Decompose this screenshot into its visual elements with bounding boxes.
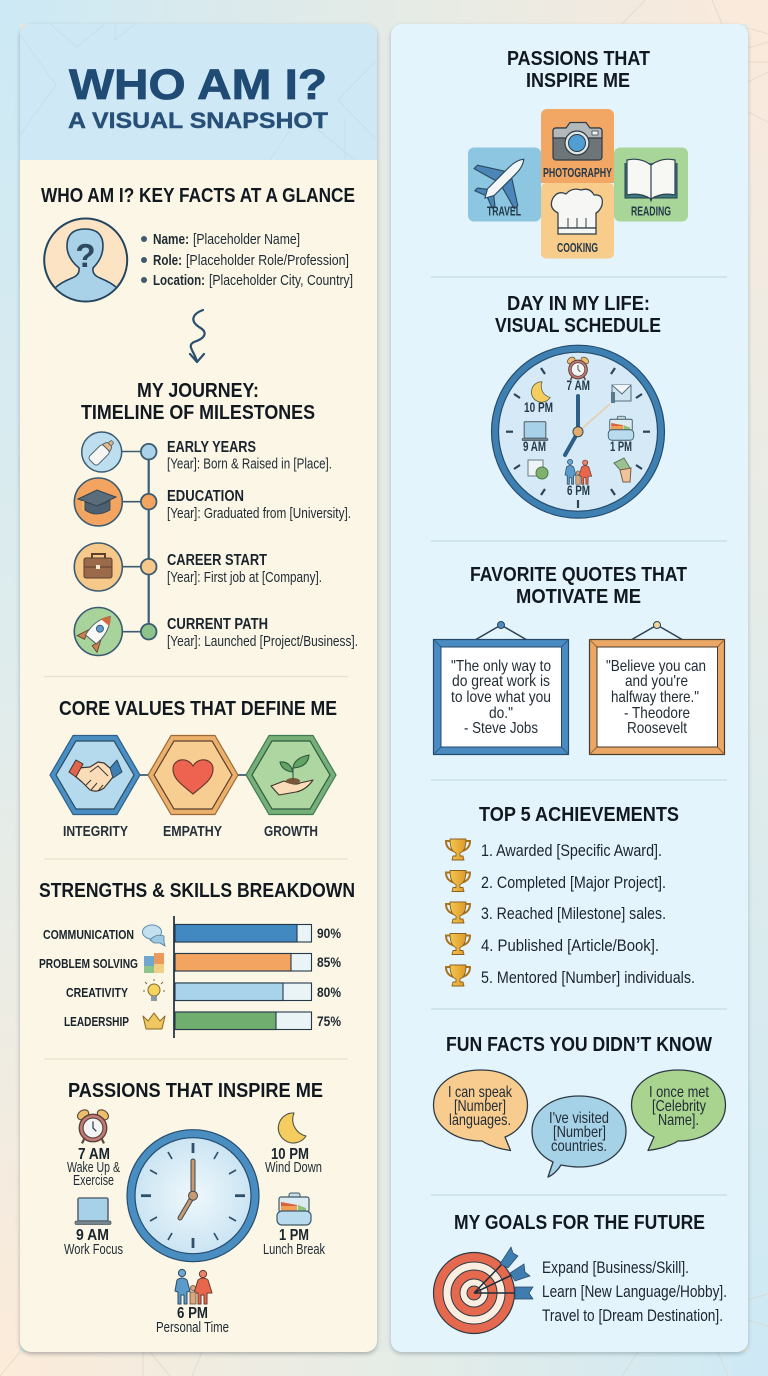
heading: passions: PASSIONS THAT INSPIRE ME [68, 1079, 323, 1102]
heading: quotes [470, 563, 687, 608]
event: 1 PM: Lunch Break [263, 1242, 326, 1258]
icon: mystery person avatar: ? [75, 237, 96, 274]
quote frame: Theodore Roosevelt: halfway there." [611, 689, 699, 706]
title banner [20, 24, 377, 160]
achievement 2 [446, 870, 666, 892]
achievement 5: 5. Mentored [Number] individuals. [481, 969, 695, 987]
title: who am I: WHO AM I? [69, 61, 327, 109]
quote frame: Steve Jobs [434, 622, 568, 754]
clock item: 7 AM: 7 AM [566, 378, 590, 393]
clock item: 9 AM: 9 AM [523, 439, 546, 454]
heading: achievements: TOP 5 ACHIEVEMENTS [479, 803, 679, 826]
event: 10 PM [265, 1113, 322, 1176]
section: achievements [446, 803, 695, 987]
event: 9 AM: Work Focus [64, 1242, 123, 1258]
event: 7 AM: 7 AM [78, 1146, 110, 1163]
clock item: 7 AM [566, 356, 590, 393]
quote frame: Steve Jobs: do great work is [452, 673, 550, 690]
value: integrity [50, 736, 140, 814]
value: empathy [148, 736, 238, 814]
event: 6 PM [156, 1269, 229, 1336]
facts list: Location: [153, 273, 205, 289]
milestone: early years: [Year]: Born & Raised in [Place]. [167, 456, 332, 472]
heading: journey: MY JOURNEY: [137, 379, 259, 402]
bar: creativity: CREATIVITY [66, 986, 129, 1000]
achievement 3: 3. Reached [Milestone] sales. [481, 905, 666, 923]
icon: mystery person avatar [44, 218, 127, 310]
panel: right column [391, 24, 748, 1352]
milestone: career start [74, 543, 322, 591]
event: 7 AM: Exercise [73, 1173, 114, 1189]
heading: fun facts: FUN FACTS YOU DIDN’T KNOW [446, 1033, 713, 1056]
section: day schedule [492, 292, 664, 518]
event: 9 AM: 9 AM [76, 1227, 109, 1244]
tile: travel [463, 139, 544, 222]
icon: hand with leaves [614, 458, 631, 482]
quote frame: Theodore Roosevelt: - Theodore [624, 705, 690, 722]
achievement 3 [446, 902, 666, 923]
tile: photography [541, 109, 614, 183]
value labels: INTEGRITY [63, 824, 128, 840]
milestone: early years [82, 432, 332, 472]
goals list: Travel to [Dream Destination]. [542, 1307, 723, 1325]
clock [127, 1130, 259, 1262]
speech bubble: languages: [Number] [454, 1098, 506, 1115]
milestone: career start: [Year]: First job at [Company]. [167, 570, 322, 586]
milestone: education: EDUCATION [167, 488, 244, 505]
event: 10 PM: Wind Down [265, 1160, 322, 1176]
section: passions tiles [463, 47, 688, 258]
quote frame: Steve Jobs: to love what you [451, 689, 551, 706]
milestone: current path [74, 608, 358, 656]
bar: leadership: 75% [317, 1013, 341, 1029]
section: goals [434, 1211, 727, 1334]
speech bubble: countries: [Number] [553, 1124, 606, 1141]
icon: target with arrows [434, 1247, 533, 1334]
speech bubble: celebrity [632, 1070, 726, 1150]
heading: key facts: WHO AM I? KEY FACTS AT A GLANCE [41, 184, 355, 207]
milestone: education [74, 478, 351, 526]
achievement 2: 2. Completed [Major Project]. [481, 874, 666, 892]
heading: passions tiles [507, 47, 650, 92]
value: growth [246, 736, 336, 814]
event: 6 PM: 6 PM [177, 1305, 208, 1322]
milestone: early years: EARLY YEARS [167, 439, 256, 456]
tile: cooking: COOKING [557, 241, 598, 255]
achievement 1 [446, 839, 662, 860]
tile: cooking [541, 183, 614, 258]
heading: passions tiles: PASSIONS THAT [507, 47, 650, 70]
clock: visual schedule [492, 345, 664, 518]
heading: quotes: FAVORITE QUOTES THAT [470, 563, 687, 586]
heading: goals: MY GOALS FOR THE FUTURE [454, 1211, 705, 1234]
bar: leadership: LEADERSHIP [64, 1015, 129, 1029]
section: passions clock [64, 1079, 326, 1336]
facts list: Role: [153, 253, 182, 269]
event: 6 PM: Personal Time [156, 1320, 229, 1336]
section: fun facts [434, 1033, 726, 1177]
goals list: Learn [New Language/Hobby]. [542, 1283, 727, 1301]
facts list: [Placeholder City, Country] [209, 273, 353, 289]
bar: creativity: 80% [317, 984, 341, 1000]
bar: communication [43, 924, 341, 946]
speech bubble: countries: countries. [551, 1138, 607, 1155]
event: 1 PM: 1 PM [279, 1227, 309, 1244]
clock item: 1 PM [608, 416, 634, 454]
goals list [542, 1259, 727, 1325]
bar: communication: 90% [317, 925, 341, 941]
quote frame: Theodore Roosevelt: "Believe you can [606, 658, 706, 675]
icon: calendar [528, 460, 548, 479]
subtitle: A VISUAL SNAPSHOT [68, 108, 328, 133]
quote frame: Theodore Roosevelt: Roosevelt [627, 720, 687, 737]
bar: problem solving: PROBLEM SOLVING [39, 957, 138, 971]
speech bubble: countries [532, 1096, 626, 1177]
clock item: 1 PM: 1 PM [610, 439, 632, 454]
speech bubble: languages: I can speak [448, 1084, 513, 1101]
icon: photo mail [611, 385, 631, 403]
value labels: GROWTH [264, 824, 318, 840]
heading: day in my life: VISUAL SCHEDULE [495, 314, 661, 337]
heading: quotes: MOTIVATE ME [516, 585, 641, 608]
speech bubble: celebrity: Name]. [658, 1112, 699, 1129]
quote frame: Steve Jobs: - Steve Jobs [464, 720, 538, 737]
achievement 4: 4. Published [Article/Book]. [481, 937, 659, 955]
clock item: 6 PM: 6 PM [567, 483, 590, 498]
speech bubble: languages [434, 1070, 528, 1150]
section: skills bar chart [39, 879, 355, 1038]
quote frame: Theodore Roosevelt [590, 622, 724, 754]
achievement 1: 1. Awarded [Specific Award]. [481, 842, 662, 860]
bar: problem solving [39, 953, 341, 973]
heading: day in my life [495, 292, 661, 337]
value labels: EMPATHY [163, 824, 222, 840]
panel: left column [20, 24, 377, 1352]
facts list: Name: [153, 232, 189, 248]
facts list: [Placeholder Name] [193, 232, 300, 248]
value labels [63, 824, 318, 840]
quote frame: Steve Jobs: do." [489, 705, 513, 722]
speech bubble: languages: languages. [449, 1112, 511, 1129]
bar: communication: COMMUNICATION [43, 928, 134, 942]
heading: journey: TIMELINE OF MILESTONES [81, 401, 315, 424]
tile: photography: PHOTOGRAPHY [543, 166, 612, 180]
section: key facts [41, 184, 355, 362]
bar: problem solving: 85% [317, 954, 341, 970]
speech bubble: celebrity: I once met [649, 1084, 709, 1101]
section: quotes [434, 563, 724, 754]
event: 1 PM [263, 1193, 326, 1258]
milestone: career start: CAREER START [167, 552, 267, 569]
clock item: 9 AM [522, 422, 548, 454]
goals list: Expand [Business/Skill]. [542, 1259, 689, 1277]
event: 9 AM [64, 1198, 123, 1258]
speech bubble: celebrity: [Celebrity [652, 1098, 706, 1115]
tile: travel: TRAVEL [487, 204, 521, 218]
clock item: 6 PM [565, 459, 592, 498]
heading: strengths: STRENGTHS & SKILLS BREAKDOWN [39, 879, 355, 902]
milestone: current path: [Year]: Launched [Project/Business]. [167, 634, 358, 650]
milestone: current path: CURRENT PATH [167, 616, 268, 633]
facts list: [Placeholder Role/Profession] [186, 253, 349, 269]
section: timeline [74, 379, 358, 656]
arrow: squiggle down [190, 310, 205, 362]
bar: leadership [64, 1012, 341, 1030]
event: 10 PM: 10 PM [271, 1146, 309, 1163]
clock item: 10 PM: 10 PM [524, 400, 553, 415]
event: 7 AM [67, 1108, 120, 1189]
quote frame: Steve Jobs: "The only way to [451, 658, 551, 675]
bar: creativity [66, 979, 341, 1001]
tile: reading [614, 148, 688, 222]
section: core values [50, 697, 337, 840]
quote frame: Theodore Roosevelt: and you're [625, 673, 688, 690]
heading: core values: CORE VALUES THAT DEFINE ME [59, 697, 337, 720]
heading: journey [81, 379, 315, 424]
heading: day in my life: DAY IN MY LIFE: [507, 292, 650, 315]
tile: reading: READING [631, 204, 671, 218]
achievement 5 [446, 965, 695, 987]
facts list [141, 232, 353, 289]
speech bubble: countries: I've visited [549, 1110, 609, 1127]
event: 7 AM: Wake Up & [67, 1160, 120, 1176]
achievement 4 [446, 934, 659, 955]
clock item: 10 PM [524, 382, 553, 415]
milestone: education: [Year]: Graduated from [University]. [167, 506, 351, 522]
heading: passions tiles: INSPIRE ME [526, 69, 630, 92]
